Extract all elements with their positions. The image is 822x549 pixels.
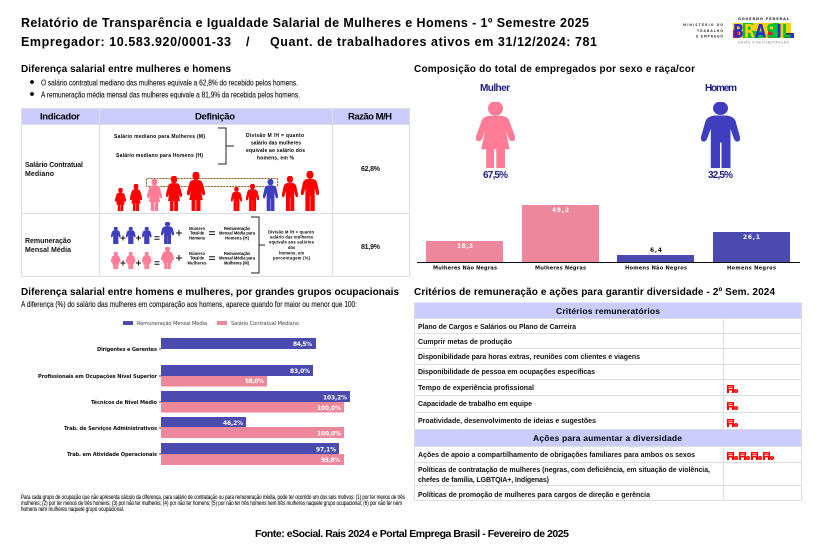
bar values: 97,1% bbox=[316, 448, 336, 454]
column chart: sexo e raça/cor: Homens Negros bbox=[727, 266, 776, 272]
section: critérios remuneratórios: Plano de Cargos e Salários ou Plano de Carreira bbox=[418, 324, 576, 331]
panel: indicator table bbox=[22, 108, 410, 276]
column chart: sexo e raça/cor: 49,2 bbox=[552, 208, 569, 214]
heading: composição: Composição do total de empregados por sexo e raça/cor bbox=[414, 64, 695, 75]
heading: critérios: Critérios de remuneração e ações para garantir diversidade - 2º Sem. 2024 bbox=[414, 287, 775, 298]
section: critérios remuneratórios: Cumprir metas de produção bbox=[418, 339, 512, 346]
logo: ministério bbox=[683, 22, 723, 38]
footnote: Para cada grupo de ocupação que não apresenta cálculo da diferença, para salário de contratação ou para remuneração média, pode ter ocorrido um dos seis motivos: (1) por ter menos de três bbox=[21, 495, 405, 501]
bullet list bbox=[30, 78, 300, 100]
row: remuneração mensal média: Total de bbox=[190, 230, 205, 236]
title bbox=[21, 16, 597, 49]
figure: homem: Homem bbox=[705, 83, 737, 94]
row: remuneração mensal média: Homens (H) bbox=[225, 236, 250, 240]
bar chart: occupational groups bbox=[38, 338, 350, 465]
section: critérios remuneratórios: Proatividade, desenvolvimento de ideias e sugestões bbox=[418, 418, 596, 425]
table header bbox=[40, 112, 392, 122]
row: salário contratual mediano bbox=[25, 128, 381, 211]
row: remuneração mensal média: Mensal Média bbox=[25, 247, 71, 254]
row: remuneração mensal média: Mulheres bbox=[188, 260, 207, 266]
section: ações para diversidade: Ações de apoio a compartilhamento de obrigações familiares para ambos os sexos bbox=[418, 452, 695, 459]
section: ações para diversidade: Políticas de promoção de mulheres para cargos de direção e gerência bbox=[418, 492, 650, 499]
figure: mulher: Mulher bbox=[480, 83, 510, 94]
section: critérios remuneratórios: Disponibilidade de pessoa em ocupações específicas bbox=[418, 369, 595, 376]
row: salário contratual mediano: Salário Contratual bbox=[25, 162, 83, 169]
heading: diferença salarial: Diferença salarial entre mulheres e homens bbox=[21, 64, 231, 75]
bar values: 100,0% bbox=[317, 432, 341, 438]
bullet list: O salário contratual mediano das mulheres equivale a 62,8% do recebido pelos homens. bbox=[41, 78, 298, 88]
legend bbox=[123, 320, 299, 327]
figure: homem bbox=[701, 83, 740, 181]
panel: criteria table bbox=[414, 302, 802, 500]
figure: mulher: 67,5% bbox=[483, 170, 508, 181]
column chart: sexo e raça/cor: Mulheres Negras bbox=[535, 266, 586, 272]
title: Empregador: 10.583.920/0001-33 bbox=[21, 35, 231, 49]
logo: ministério: TRABALHO bbox=[697, 29, 723, 33]
source: Fonte: eSocial. Rais 2024 e Portal Emprega Brasil - Fevereiro de 2025 bbox=[255, 528, 569, 540]
row: salário contratual mediano: Salário mediano para Mulheres (M) bbox=[114, 134, 205, 140]
logo: ministério: MINISTÉRIO DO bbox=[683, 22, 723, 27]
bullet list: A remuneração média mensal das mulheres equivale a 81,9% da recebida pelos homens. bbox=[41, 90, 300, 100]
bar values bbox=[223, 342, 347, 464]
row: remuneração mensal média bbox=[25, 217, 381, 273]
row: remuneração mensal média: Total de bbox=[190, 256, 205, 260]
title: Relatório de Transparência e Igualdade Salarial de Mulheres e Homens - 1º Semestre 2025 bbox=[21, 16, 589, 30]
bar values: 46,2% bbox=[223, 421, 243, 427]
footnote bbox=[21, 495, 405, 513]
section: critérios remuneratórios: Critérios remuneratórios bbox=[556, 306, 660, 316]
footnote: homens nem mulheres naquele grupo ocupacional. bbox=[21, 507, 124, 513]
table header: Razão M/H bbox=[348, 112, 392, 122]
row: remuneração mensal média: Número bbox=[189, 226, 205, 231]
logo: ministério: E EMPREGO bbox=[696, 34, 723, 38]
category labels bbox=[38, 347, 158, 458]
row: remuneração mensal média: Número bbox=[189, 251, 205, 256]
row: salário contratual mediano: salário das mulheres bbox=[251, 140, 301, 146]
row: remuneração mensal média: porcentagem (%) bbox=[273, 256, 311, 260]
row: salário contratual mediano: equivale ao salário dos bbox=[246, 148, 305, 154]
figure: mulher bbox=[476, 83, 515, 181]
bar values: 83,0% bbox=[290, 369, 310, 375]
column chart: sexo e raça/cor bbox=[417, 205, 800, 272]
row: remuneração mensal média: Mensal Média para bbox=[219, 256, 256, 260]
bar values: 58,0% bbox=[245, 379, 264, 385]
table header: Indicador bbox=[40, 112, 80, 122]
row: salário contratual mediano: Salário mediano para Homens (H) bbox=[116, 153, 203, 159]
logo: governo federal brasil: UNIÃO E RECONSTRUÇÃO bbox=[738, 40, 789, 44]
row: remuneração mensal média: Homens bbox=[189, 236, 206, 240]
section: critérios remuneratórios: Capacidade de trabalho em equipe bbox=[418, 401, 532, 408]
row: remuneração mensal média: homens, em bbox=[279, 250, 304, 256]
section: ações para diversidade: Ações para aumentar a diversidade bbox=[533, 433, 682, 443]
row: remuneração mensal média: equivale aos salários bbox=[269, 240, 315, 244]
row: remuneração mensal média: 81,9% bbox=[361, 244, 381, 251]
table header: Definição bbox=[195, 112, 235, 122]
heading: grupos ocupacionais: Diferença salarial entre homens e mulheres, por grandes grupos ocupacionais bbox=[21, 287, 399, 298]
section: critérios remuneratórios: Disponibilidade para horas extras, reuniões com clientes e viagens bbox=[418, 354, 640, 361]
figure: homem: 32,5% bbox=[708, 170, 733, 181]
column chart: sexo e raça/cor: 18,3 bbox=[457, 244, 473, 250]
row: remuneração mensal média: Remuneração bbox=[224, 251, 250, 256]
row: remuneração mensal média: dos bbox=[288, 245, 296, 250]
bar values: 99,8% bbox=[321, 458, 340, 464]
category labels: Trab. de Serviços Administrativos bbox=[64, 426, 157, 432]
category labels: Dirigentes e Gerentes bbox=[97, 347, 157, 353]
bars bbox=[161, 338, 350, 465]
title: / bbox=[246, 35, 250, 49]
row: remuneração mensal média: salário das mulheres bbox=[270, 234, 314, 240]
logo: governo federal brasil: GOVERNO FEDERAL bbox=[738, 17, 790, 21]
row: salário contratual mediano: Divisão M /H = quanto bbox=[246, 133, 304, 139]
row: remuneração mensal média: Remuneração bbox=[224, 226, 250, 231]
section: critérios remuneratórios bbox=[418, 306, 737, 427]
row: salário contratual mediano: Mediano bbox=[25, 171, 54, 178]
bar values: 103,2% bbox=[323, 396, 347, 402]
title: Quant. de trabalhadores ativos em 31/12/2024: 781 bbox=[270, 35, 597, 49]
column chart: sexo e raça/cor: 6,4 bbox=[650, 248, 662, 254]
row: salário contratual mediano: homens, em % bbox=[257, 156, 295, 162]
legend: Salário Contratual Mediano bbox=[231, 320, 299, 327]
bar values: 100,0% bbox=[317, 406, 341, 412]
section: critérios remuneratórios: Tempo de experiência profissional bbox=[418, 385, 534, 392]
column chart: sexo e raça/cor: Mulheres Não Negras bbox=[433, 266, 497, 272]
row: remuneração mensal média: Mensal Média para bbox=[219, 230, 256, 236]
logo: governo federal brasil: BRASIL bbox=[733, 20, 791, 42]
category labels: Trab. em Atividade Operacionais bbox=[67, 452, 157, 458]
category labels: Técnicos de Nível Médio bbox=[91, 399, 158, 406]
section: ações para diversidade: chefes de família, LGBTQIA+, Indígenas) bbox=[418, 477, 549, 484]
bar values: 84,5% bbox=[293, 342, 312, 348]
subheading: grupos ocupacionais: A diferença (%) do salário das mulheres em comparação aos homens, aparece quando for maior ou menor que 100: bbox=[21, 300, 357, 309]
section: ações para diversidade bbox=[418, 433, 773, 499]
row: remuneração mensal média: Remuneração bbox=[25, 238, 71, 245]
column chart: sexo e raça/cor: 26,1 bbox=[743, 235, 760, 241]
column chart: sexo e raça/cor: Homens Não Negros bbox=[625, 266, 687, 272]
row: salário contratual mediano: 62,8% bbox=[361, 166, 381, 173]
row: remuneração mensal média: Mulheres (M) bbox=[224, 260, 250, 266]
row: remuneração mensal média: Divisão M /H = quanto bbox=[268, 230, 314, 234]
legend: Remuneração Mensal Média bbox=[137, 320, 207, 327]
footnote: mulheres; (2) por ter menos de três homens; (3) por não ter mulheres; (4) por não ter homens; (5) por não ter três homens nem três mulheres naquele grupo ocupacional; (6) por não ter nem bbox=[21, 501, 402, 507]
section: ações para diversidade: Políticas de contratação de mulheres (negras, com deficiência, em situação de violência, bbox=[418, 467, 710, 474]
category labels: Profissionais em Ocupações Nível Superior bbox=[38, 373, 157, 380]
